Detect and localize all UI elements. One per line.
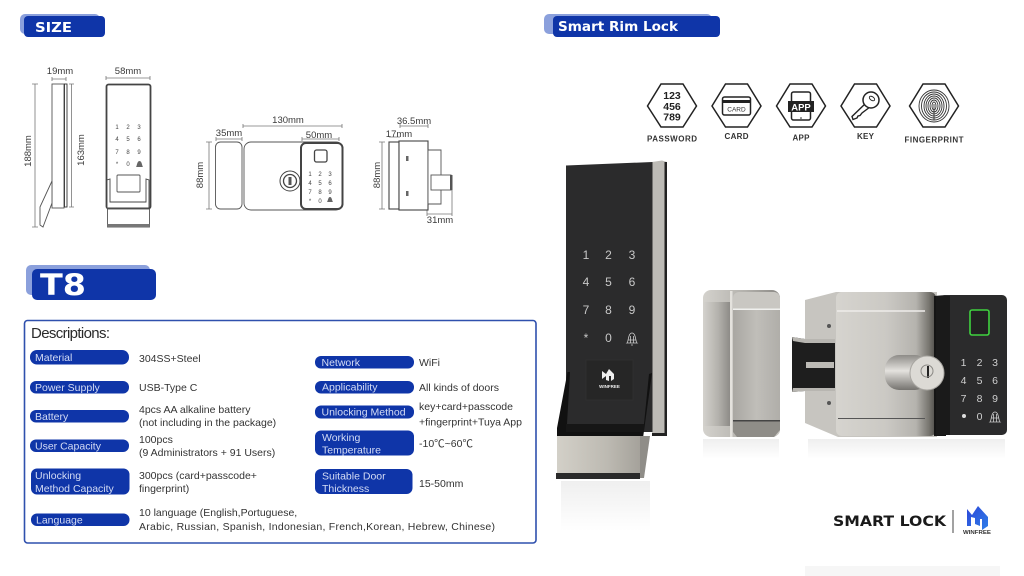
dimension drawing: lock front: 8 <box>318 190 322 196</box>
product: keypad panel with card holder: 1 <box>583 248 590 262</box>
key cylinder <box>885 355 944 390</box>
tray <box>557 372 652 438</box>
row: unlocking method <box>315 401 522 428</box>
dimension drawing: lock front: 88mm <box>195 162 206 188</box>
dimension drawing: lock side: 88mm <box>372 162 383 188</box>
heading: T8 <box>26 265 156 302</box>
dimension drawing: front view: 6 <box>137 137 141 143</box>
dimension drawing: front view: 5 <box>126 137 130 143</box>
lock keypad: 2 <box>977 357 983 369</box>
row: network: Network <box>322 357 361 369</box>
row: network: WiFi <box>419 357 440 369</box>
dimension drawing: lock front: 0 <box>318 199 322 205</box>
row: suitable door thickness <box>315 469 464 495</box>
product: keypad panel with card holder: 6 <box>629 275 636 289</box>
descriptions title: Descriptions: <box>31 325 110 342</box>
lock keypad: 9 <box>992 393 998 405</box>
dimension drawing: side view: 19mm <box>47 66 73 77</box>
icon: password <box>647 84 697 144</box>
brand: smart lock winfree: WINFREE <box>963 530 991 536</box>
row: unlocking method: key+card+passcode <box>419 401 513 413</box>
dimension drawing: lock front: 2 <box>318 172 322 178</box>
dimension drawing: front view: 7 <box>115 150 119 156</box>
product: keypad panel with card holder: 7 <box>583 303 590 317</box>
dimension drawing: side view: 163mm <box>76 134 87 166</box>
dimension drawing: lock front: 9 <box>328 190 332 196</box>
row: unlocking method capacity: Unlocking <box>35 470 81 482</box>
row: battery: 4pcs AA alkaline battery <box>139 404 251 416</box>
dimension drawing: front view: 3 <box>137 125 141 131</box>
dimension drawing: front view: 9 <box>137 150 141 156</box>
row: material: 304SS+Steel <box>139 353 201 365</box>
row: suitable door thickness: Thickness <box>322 483 369 495</box>
lock keypad: 7 <box>961 393 967 405</box>
heading: Smart Rim Lock: Smart Rim Lock <box>558 19 679 35</box>
icon: card <box>712 84 761 141</box>
icon: key: KEY <box>857 132 875 141</box>
icon: password: PASSWORD <box>647 134 697 144</box>
lock keypad: 4 <box>961 375 967 387</box>
row: power supply: Power Supply <box>35 382 101 394</box>
dimension drawing: lock side <box>372 116 453 226</box>
dimension drawing: lock front: 7 <box>308 190 312 196</box>
heading: SIZE <box>20 14 105 37</box>
heading: T8: T8 <box>40 268 86 302</box>
icon: fingerprint: FINGERPRINT <box>904 136 964 144</box>
logo mark <box>967 506 988 530</box>
icon: fingerprint <box>904 84 964 144</box>
dimension drawing: lock front: 130mm <box>272 115 304 126</box>
product: keypad panel with card holder <box>556 160 667 479</box>
row: battery: Battery <box>35 411 69 423</box>
product: keypad panel with card holder: 4 <box>583 275 590 289</box>
product: keypad panel with card holder: 8 <box>605 303 612 317</box>
brand: smart lock winfree <box>833 506 991 536</box>
product: keypad panel with card holder: * <box>584 331 589 345</box>
product: lock body <box>792 292 1007 437</box>
row: language <box>31 507 495 533</box>
row: unlocking method capacity: Method Capacity <box>35 483 115 495</box>
product: keypad panel with card holder: 9 <box>629 303 636 317</box>
row: language: Arabic, Russian, Spanish, Indonesian, French,Korean, Hebrew, Chinese) <box>139 521 495 533</box>
row: battery: (not including in the package) <box>139 417 276 429</box>
row: user capacity <box>30 434 275 459</box>
dimension drawing: front view: 0 <box>126 162 130 168</box>
icon: password: 123 <box>663 90 681 102</box>
lock keypad: 0 <box>977 411 983 423</box>
row: unlocking method: +fingerprint+Tuya App <box>419 416 522 428</box>
row: working temperature <box>315 430 473 456</box>
lock keypad <box>934 295 1007 436</box>
row: working temperature: -10℃~60℃ <box>419 438 473 450</box>
icon: app: APP <box>791 102 811 114</box>
lock keypad: 1 <box>961 357 967 369</box>
latch bolt <box>792 337 835 392</box>
lock keypad: 3 <box>992 357 998 369</box>
product: keypad panel with card holder: 3 <box>629 248 636 262</box>
dimension drawing: front view: 8 <box>126 150 130 156</box>
row: material: Material <box>35 352 72 364</box>
row: working temperature: Working <box>322 432 360 444</box>
heading: Smart Rim Lock <box>544 14 720 37</box>
brand: smart lock winfree: SMART LOCK <box>833 514 947 530</box>
dimension drawing: lock side: 31mm <box>427 215 453 226</box>
dimension drawing: lock front: * <box>309 199 312 205</box>
dimension drawing: lock side: 36.5mm <box>397 116 431 127</box>
product: keypad panel with card holder: 0 <box>605 331 612 345</box>
row: suitable door thickness: Suitable Door <box>322 470 386 482</box>
row: power supply <box>30 381 198 394</box>
icon: key <box>841 84 890 141</box>
row: suitable door thickness: 15-50mm <box>419 478 464 490</box>
row: unlocking method: Unlocking Method <box>322 406 406 418</box>
row: language: 10 language (English,Portuguese, <box>139 507 297 519</box>
heading: SIZE: SIZE <box>35 21 72 36</box>
dimension drawing: front view: 1 <box>115 125 119 131</box>
row: power supply: USB-Type C <box>139 382 198 394</box>
row: unlocking method capacity <box>31 468 257 495</box>
icon: password: 789 <box>663 112 681 124</box>
row: network <box>315 356 440 369</box>
dimension drawing: side view <box>23 66 87 227</box>
row: applicability: All kinds of doors <box>419 382 499 394</box>
icon: password: 456 <box>663 101 681 113</box>
lock keypad: 5 <box>977 375 983 387</box>
row: user capacity: (9 Administrators + 91 Users) <box>139 447 275 459</box>
dimension drawing: front view: 4 <box>115 137 119 143</box>
row: applicability: Applicability <box>322 382 378 394</box>
row: applicability <box>315 381 499 394</box>
dimension drawing: lock side: 17mm <box>386 129 412 140</box>
row: battery <box>30 404 276 429</box>
product: keypad panel with card holder: 5 <box>605 275 612 289</box>
reflections under products <box>561 439 1005 576</box>
row: user capacity: 100pcs <box>139 434 173 446</box>
row: user capacity: User Capacity <box>35 440 102 452</box>
dimension drawing: side view: 188mm <box>23 135 34 167</box>
panel: descriptions <box>24 320 536 543</box>
icon: app <box>776 84 826 142</box>
dimension drawing: lock front: 5 <box>318 181 322 187</box>
lock keypad: 8 <box>977 393 983 405</box>
dimension drawing: front view <box>106 66 150 227</box>
icon: app: APP <box>792 134 810 142</box>
dimension drawing: lock front: 35mm <box>216 128 242 139</box>
product: strike box <box>703 290 780 437</box>
row: working temperature: Temperature <box>322 444 381 456</box>
dimension drawing: front view: * <box>116 162 119 168</box>
icon: card: CARD <box>724 132 749 141</box>
product: keypad panel with card holder: WINFREE <box>599 384 620 389</box>
dimension drawing: lock front: 50mm <box>306 130 332 141</box>
dimension drawing: lock front: 1 <box>308 172 312 178</box>
row: unlocking method capacity: 300pcs (card+passcode+ <box>139 470 257 482</box>
dimension drawing: lock front: 6 <box>328 181 332 187</box>
icon: card: CARD <box>727 106 746 114</box>
lock keypad: 6 <box>992 375 998 387</box>
row: language: Language <box>36 514 83 526</box>
row: material <box>30 350 201 365</box>
dimension drawing: front view: 2 <box>126 125 130 131</box>
dimension drawing: front view: 58mm <box>115 66 141 77</box>
dimension drawing: lock front: 4 <box>308 181 312 187</box>
dimension drawing: lock front <box>195 115 343 210</box>
product: keypad panel with card holder: 2 <box>605 248 612 262</box>
dimension drawing: lock front: 3 <box>328 172 332 178</box>
row: unlocking method capacity: fingerprint) <box>139 483 189 495</box>
